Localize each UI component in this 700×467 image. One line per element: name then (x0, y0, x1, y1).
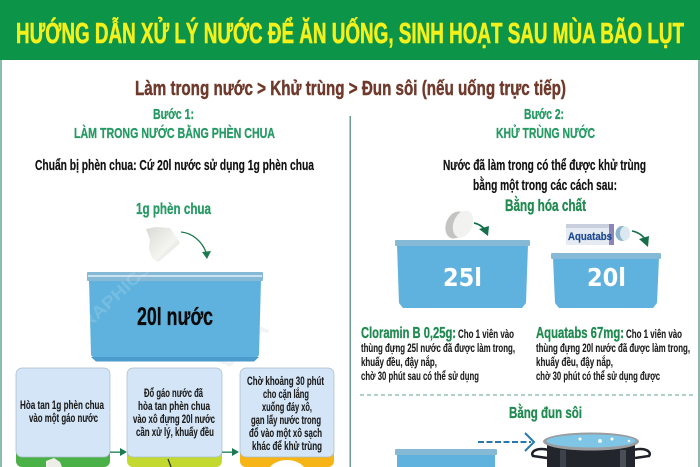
text: Cloramin B: chờ 30 phút sau có thể sử dụng (361, 369, 479, 383)
alum label: 1g phèn chua (136, 201, 211, 218)
arrow: card 2 to card 3 (222, 448, 239, 456)
text: VNA (211, 315, 274, 376)
step card: pour and stir: hòa tan phèn chua (138, 399, 210, 413)
panel: step 2 (360, 106, 695, 467)
arrow: tablet into bucket (474, 223, 489, 236)
step card: pour and stir: vào xô đựng 20l nước (133, 412, 215, 426)
intro text (443, 158, 646, 194)
bucket: 25l (395, 240, 530, 308)
bucket: 25l: 25l (443, 263, 482, 292)
step card: settle and decant: xuống đáy xô, (262, 400, 312, 414)
subtitle: Làm trong nước > Khử trùng > Đun sôi (nếu uống trực tiếp) (135, 77, 566, 100)
intro text: bằng một trong các cách sau: (473, 176, 617, 194)
step card: pour and stir: Đổ gáo nước đã (144, 386, 203, 400)
step card: settle and decant: Chờ khoảng 30 phút (247, 374, 324, 388)
step 1 heading (74, 106, 275, 142)
step card: settle and decant: khác để khử trùng (252, 439, 322, 453)
step card: settle and decant: đổ vào một xô sạch (249, 426, 322, 440)
arrow: alum into bucket (181, 232, 211, 259)
text: Aquatabs: khuấy đều, đậy nắp, (536, 354, 613, 369)
step card: pour and stir (127, 368, 222, 467)
preparation text: Chuẩn bị phèn chua: Cứ 20l nước sử dụng 1g phèn chua (35, 158, 315, 174)
icon: Aquatabs pack (566, 224, 614, 245)
icon: alum in ladle (46, 458, 62, 467)
text: Cloramin B: thùng đựng 25l nước đã được làm trong, (361, 341, 515, 355)
bucket: boiling section (395, 449, 497, 467)
bucket: 20l: 20l (587, 263, 626, 292)
step card: dissolve alum: Hòa tan 1g phèn chua (20, 398, 104, 412)
text: Aquatabs: Aquatabs 67mg: (536, 325, 624, 342)
arrow: card 1 to card 2 (110, 448, 127, 456)
text: Cloramin B (361, 325, 515, 383)
icon: Aquatabs pack: Aquatabs (568, 231, 612, 243)
arrow: Aquatabs into bucket (632, 231, 649, 247)
text: Aquatabs (536, 325, 690, 383)
step 1 heading: LÀM TRONG NƯỚC BẰNG PHÈN CHUA (74, 124, 275, 142)
icon: stirring stick (168, 459, 171, 467)
text: Cloramin B: khuấy đều, đậy nắp, (361, 354, 437, 369)
header banner (0, 0, 700, 60)
step card: dissolve alum: vào một gáo nước (29, 411, 98, 425)
icon: chloramine tablet (441, 207, 477, 242)
step card: pour and stir: cần xử lý, khuấy đều (136, 425, 214, 439)
step card: settle and decant: cho cặn lắng (263, 386, 309, 401)
boiling method heading: Bằng đun sôi (509, 404, 582, 422)
bucket: 20l (551, 253, 661, 308)
bucket: 20l water: 20l nước (137, 303, 213, 331)
arrow: dashed bucket to pot (478, 433, 534, 451)
step 1 heading: Bước 1: (153, 106, 194, 123)
step 2 heading: KHỬ TRÙNG NƯỚC (496, 124, 595, 142)
step card: settle and decant: gạn lấy nước trong (251, 413, 321, 427)
icon: boiling pot (532, 432, 650, 467)
text: Cloramin B: Cho 1 viên vào (458, 327, 514, 341)
step 2 heading: Bước 2: (524, 106, 564, 123)
icon: alum crystal (146, 227, 180, 262)
step card: settle and decant (240, 368, 334, 467)
bucket: 20l water (87, 272, 263, 362)
icon: Aquatabs tablet (616, 226, 630, 241)
icon: clean bucket (268, 460, 306, 467)
panel: step 1 (16, 106, 334, 467)
chemical method heading: Bằng hóa chất (505, 196, 586, 215)
text: Cloramin B: Cloramin B 0,25g: (361, 325, 456, 342)
watermark: INFOGRAPHICS (32, 259, 154, 375)
step card: dissolve alum (16, 368, 110, 467)
step 2 heading (496, 106, 595, 142)
